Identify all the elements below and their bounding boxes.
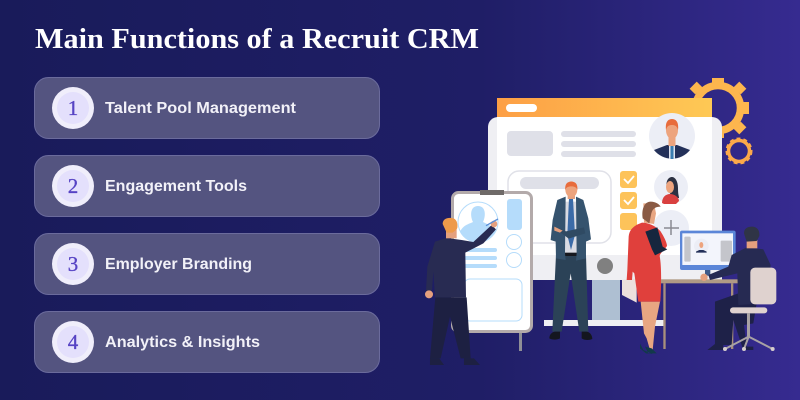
person: seated man with chair bbox=[700, 227, 776, 351]
person: woman in red dress bbox=[622, 202, 667, 354]
title: Main Functions of a Recruit CRM bbox=[35, 23, 479, 55]
stand bbox=[592, 280, 620, 320]
card 2: Engagement Tools: Engagement Tools bbox=[105, 178, 247, 195]
card 1: Talent Pool Management: 1 bbox=[68, 96, 78, 120]
avatar: man bbox=[649, 113, 695, 159]
card 4: Analytics & Insights: 4 bbox=[68, 330, 79, 354]
avatar: woman bbox=[654, 170, 688, 204]
desk with computer bbox=[661, 231, 740, 349]
card 2: Engagement Tools: 2 bbox=[68, 174, 78, 198]
checkboxes bbox=[620, 171, 637, 230]
icon: large gear bbox=[688, 78, 749, 138]
list of functions bbox=[34, 78, 380, 372]
card 1: Talent Pool Management bbox=[34, 78, 380, 138]
window header bbox=[497, 98, 712, 117]
monitor bbox=[680, 231, 736, 276]
card 4: Analytics & Insights bbox=[34, 312, 380, 372]
dashboard window bbox=[488, 98, 722, 326]
card 1: Talent Pool Management: Talent Pool Management bbox=[105, 100, 296, 117]
card 3: Employer Branding: 3 bbox=[68, 252, 78, 276]
card 3: Employer Branding: Employer Branding bbox=[105, 256, 252, 273]
icon: small gear bbox=[726, 138, 752, 164]
card 2: Engagement Tools bbox=[34, 156, 380, 216]
person: man with crossed arms bbox=[549, 181, 592, 340]
illustration: recruiting team with CRM dashboard bbox=[425, 78, 776, 365]
card 4: Analytics & Insights: Analytics & Insights bbox=[105, 334, 260, 351]
card 3: Employer Branding bbox=[34, 234, 380, 294]
avatar: add bbox=[653, 210, 689, 246]
flip board bbox=[452, 190, 532, 351]
person: man writing on board bbox=[425, 218, 498, 365]
